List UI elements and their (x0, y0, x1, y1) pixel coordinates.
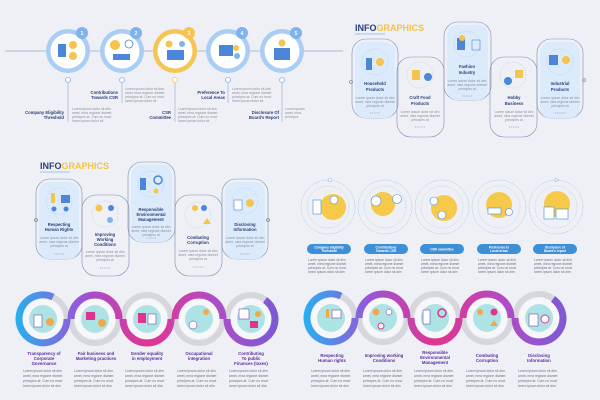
labels (27, 351, 268, 366)
body texts: amet, mea regione diamet (478, 262, 516, 266)
card: Combating Corruption: amet, mea regione diamet (178, 253, 218, 257)
card: Responsible Environmental Management: • • • • • (146, 236, 157, 240)
panel: governance ribbon: principes at. Cum no movi (23, 379, 62, 383)
label 4: Preference To (197, 90, 225, 95)
labels (318, 350, 551, 365)
pill labels: Contributions (376, 246, 397, 250)
labels: Governance (32, 361, 57, 366)
pill labels: Threshold (321, 249, 337, 253)
body texts: lorem ipsum dolor sit dim (421, 270, 458, 274)
card: Fashion Industry: • • • • • (462, 94, 473, 98)
label 2: lorem ipsum dolor sit (125, 99, 156, 103)
card: Combating Corruption: Corruption (187, 240, 209, 245)
card: Fashion Industry: Lorem ipsum dolor sit dim (448, 79, 487, 83)
panel: rights ribbon: amet, mea regione diamet (311, 374, 350, 378)
labels: Finances (taxes) (234, 361, 268, 366)
body texts: Lorem ipsum dolor sit dim (534, 258, 572, 262)
panel: rights ribbon: lorem ipsum dolor sit dim (363, 384, 401, 388)
panel: products infographic (350, 22, 586, 137)
label 2: Contributions (91, 90, 119, 95)
pill labels: Board's report (544, 249, 567, 253)
pill labels: Towards CSR (376, 249, 397, 253)
card: Industrial Products: • • • • • (555, 111, 566, 115)
panel: governance ribbon: Lorem ipsum dolor sit dim (74, 369, 113, 373)
pill labels: CSR committee (430, 248, 454, 252)
card: Responsible Environmental Management: Environmental (136, 212, 166, 217)
labels: Marketing practices (76, 356, 117, 361)
panel: CSR timeline (5, 27, 343, 123)
panel: governance ribbon: amet, mea regione diamet (229, 374, 268, 378)
card: Hobby Business (490, 57, 537, 137)
body texts: amet, mea regione diamet (308, 262, 346, 266)
card: Disclosing Information: amet, mea regione diamet (225, 240, 265, 244)
panel: CSR circles with blue labels (301, 178, 583, 274)
card: Industrial Products: Products (551, 87, 570, 92)
step 1 circle: 1 (81, 31, 84, 37)
panel: governance ribbon: amet, mea regione diamet (125, 374, 164, 378)
panel: rights ribbon: lorem ipsum dolor sit dim (311, 384, 349, 388)
labels: Improving working (365, 353, 404, 358)
card: Improving Working Conditions: Lorem ipsum dolor sit dim (86, 250, 125, 254)
panel: governance ribbon: Lorem ipsum dolor sit dim (177, 369, 216, 373)
card: Improving Working Conditions: amet, mea regione diamet (85, 254, 125, 258)
step 4 circle (206, 27, 250, 73)
label 1: Threshold (44, 115, 64, 120)
panel: governance ribbon: amet, mea regione diamet (177, 374, 216, 378)
ribbon (19, 295, 275, 343)
card: Hobby Business: Hobby (507, 95, 521, 100)
panel: rights ribbon (307, 294, 563, 388)
circle: CSR committee (415, 180, 469, 234)
card: Respecting Human Rights: Human Rights (45, 227, 74, 232)
card: Craft Food Products: • • • • • (415, 125, 426, 129)
panel: governance ribbon: principes at. Cum no movi (229, 379, 268, 383)
body texts: lorem ipsum dolor sit dim (365, 270, 402, 274)
labels: integration (188, 356, 210, 361)
label 4 (197, 87, 271, 103)
labels: Gender equality (131, 351, 164, 356)
card: Hobby Business: Lorem ipsum dolor sit dim (495, 110, 534, 114)
panel: governance ribbon: principes at. Cum no movi (177, 379, 216, 383)
card: Disclosing Information: principes at (236, 244, 254, 248)
labels: Responsible (422, 350, 448, 355)
card: Respecting Human Rights (36, 179, 82, 259)
body texts: Lorem ipsum dolor sit dim (308, 258, 346, 262)
circle: Contributions (358, 180, 412, 234)
panel: rights ribbon: principes at. Cum no movi (518, 379, 557, 383)
card: Responsible Environmental Management: Management (138, 217, 164, 222)
labels: Transparency of (27, 351, 61, 356)
label 3: principes at. Cum no movi (178, 115, 217, 119)
panel: governance ribbon: lorem ipsum dolor sit dim (229, 384, 267, 388)
labels: Fair business and (78, 351, 115, 356)
label 5: Lorem ipsum (285, 107, 305, 111)
card: Craft Food Products: Lorem ipsum dolor sit dim (401, 110, 440, 114)
card: Household Products: principes at (366, 104, 384, 108)
icons (29, 305, 265, 333)
body texts: principes at. Cum no movi (365, 266, 403, 270)
card: Industrial Products: Industrial (551, 81, 569, 86)
labels: Respecting (320, 353, 344, 358)
labels: Corporate (34, 356, 55, 361)
card: Household Products: Lorem ipsum dolor sit dim (356, 96, 395, 100)
panel: rights ribbon: principes at. Cum no movi (311, 379, 350, 383)
label 3: amet, mea regione diamet (178, 111, 217, 115)
step 4 circle: 4 (241, 31, 244, 37)
card: Industrial Products (537, 39, 583, 118)
body texts: principes at. Cum no movi (308, 266, 346, 270)
title: INFOGRAPHICS (40, 161, 109, 171)
label 4: amet, mea regione diamet (232, 91, 271, 95)
body texts: principes at. Cum no movi (478, 266, 516, 270)
body texts: lorem ipsum dolor sit dim (534, 270, 571, 274)
card: Hobby Business: principes at (505, 118, 523, 122)
body texts: principes at. Cum no movi (534, 266, 572, 270)
panel: rights ribbon: lorem ipsum dolor sit dim (466, 384, 504, 388)
card: Craft Food Products: principes at (411, 118, 429, 122)
card: Hobby Business: amet, mea regione diamet (494, 114, 534, 118)
panel: rights ribbon: lorem ipsum dolor sit dim (518, 384, 556, 388)
pill labels: Local areas (490, 249, 508, 253)
labels: Disclosing (528, 353, 550, 358)
panel: governance ribbon: Lorem ipsum dolor sit dim (125, 369, 164, 373)
card: Hobby Business: Business (505, 101, 524, 106)
panel: governance ribbon: lorem ipsum dolor sit dim (74, 384, 112, 388)
panel: governance ribbon: amet, mea regione diamet (23, 374, 62, 378)
labels: Conditions (373, 358, 396, 363)
circle: Company eligibility (301, 180, 355, 234)
panel: rights ribbon: principes at. Cum no movi (414, 379, 453, 383)
panel: rights ribbon: principes at. Cum no movi (466, 379, 505, 383)
card: Disclosing Information: Lorem ipsum dolor sit dim (226, 236, 265, 240)
labels: Environmental (420, 355, 450, 360)
card: Respecting Human Rights: amet, mea regione diamet (39, 240, 79, 244)
step 5 circle: 5 (295, 31, 298, 37)
step 5 circle (260, 27, 304, 73)
body texts: Lorem ipsum dolor sit dim (365, 258, 403, 262)
card: Combating Corruption (175, 195, 222, 276)
body texts: lorem ipsum dolor sit dim (308, 270, 345, 274)
card: Craft Food Products: Products (411, 101, 430, 106)
panel: governance ribbon: principes at. Cum no movi (74, 379, 113, 383)
label 5: Disclosure Of (252, 110, 280, 115)
body texts: Lorem ipsum dolor sit dim (478, 258, 516, 262)
panel: governance ribbon: Lorem ipsum dolor sit dim (23, 369, 62, 373)
panel: rights ribbon: Lorem ipsum dolor sit dim (518, 369, 557, 373)
card: Household Products: Household (364, 81, 386, 86)
label 3: CSR (162, 110, 171, 115)
panel: governance ribbon: lorem ipsum dolor sit dim (177, 384, 215, 388)
circle: Preference local (472, 180, 526, 234)
labels: in employment (132, 356, 163, 361)
panel: rights ribbon: amet, mea regione diamet (466, 374, 505, 378)
card: Fashion Industry: Industry (459, 70, 476, 75)
card: Respecting Human Rights: Respecting (48, 222, 71, 227)
card: Industrial Products: amet, mea regione diamet (540, 100, 580, 104)
labels: Occupational (185, 351, 213, 356)
label 1: Lorem ipsum dolor sit dim (72, 107, 111, 111)
card: Improving Working Conditions: Working (97, 237, 114, 242)
panel: governance ribbon: lorem ipsum dolor sit dim (125, 384, 163, 388)
card: Household Products: amet, mea regione diamet (355, 100, 395, 104)
label 1: amet, mea regione diamet (72, 111, 111, 115)
card: Fashion Industry (444, 22, 491, 100)
label 2: amet, mea regione diamet (125, 91, 164, 95)
card: Disclosing Information: Disclosing (234, 222, 256, 227)
label 4: principes at. Cum no movi (232, 95, 271, 99)
card: Craft Food Products: Craft Food (409, 95, 431, 100)
label 2: Towards CSR (91, 95, 118, 100)
label 3: lorem ipsum dolor sit (178, 119, 209, 123)
panel: rights ribbon: Lorem ipsum dolor sit dim (414, 369, 453, 373)
body texts: amet, mea regione diamet (365, 262, 403, 266)
label 5: Board's Report (249, 115, 280, 120)
labels: To public (242, 356, 261, 361)
labels: Information (527, 358, 551, 363)
card: Craft Food Products (397, 57, 444, 137)
card: Responsible Environmental Management: principes at (142, 233, 160, 237)
card: Hobby Business: • • • • • (509, 125, 520, 129)
card: Fashion Industry: Fashion (459, 64, 475, 69)
panel: governance ribbon: principes at. Cum no movi (125, 379, 164, 383)
card: Combating Corruption: • • • • • (193, 265, 204, 269)
step 3 circle (153, 27, 197, 73)
circle: Disclosure report (529, 180, 583, 234)
step 2 circle (100, 27, 144, 73)
labels: Contributing (238, 351, 264, 356)
panel: rights ribbon: Lorem ipsum dolor sit dim (311, 369, 350, 373)
card: Industrial Products: principes at (551, 104, 569, 108)
card: Industrial Products: Lorem ipsum dolor sit dim (541, 96, 580, 100)
body texts (308, 258, 572, 274)
panel: rights ribbon: lorem ipsum dolor sit dim (414, 384, 452, 388)
body texts: lorem ipsum dolor sit dim (478, 270, 515, 274)
label 3: Lorem ipsum dolor sit dim (178, 107, 217, 111)
pill labels: Preference to (489, 246, 509, 250)
card: Disclosing Information: • • • • • (240, 252, 251, 256)
card: Fashion Industry: principes at (458, 87, 476, 91)
labels: Combating (476, 353, 499, 358)
card: Improving Working Conditions: principes at (96, 258, 114, 262)
labels: Management (422, 360, 449, 365)
panel: rights ribbon: Lorem ipsum dolor sit dim (466, 369, 505, 373)
panel: rights ribbon: amet, mea regione diamet (518, 374, 557, 378)
label 5 (249, 107, 305, 120)
card: Improving Working Conditions (82, 195, 129, 276)
step 3 circle: 3 (188, 31, 191, 37)
label 4: lorem ipsum dolor sit (232, 99, 263, 103)
label 4: Lorem ipsum dolor sit dim (232, 87, 271, 91)
card: Respecting Human Rights: • • • • • (54, 252, 65, 256)
title: INFOGRAPHICS (355, 23, 424, 33)
card: Improving Working Conditions: • • • • • (100, 266, 111, 270)
label 5: principes (285, 115, 299, 119)
labels: Human rights (318, 358, 346, 363)
labels: Corruption (476, 358, 498, 363)
card: Improving Working Conditions: Improving (95, 232, 116, 237)
panel: governance ribbon: Lorem ipsum dolor sit dim (229, 369, 268, 373)
panel: rights infographic (34, 161, 270, 276)
step 1 circle (46, 27, 90, 73)
card: Household Products: • • • • • (370, 111, 381, 115)
panel: rights ribbon: Lorem ipsum dolor sit dim (363, 369, 402, 373)
ribbon (307, 294, 563, 342)
card: Fashion Industry: amet, mea regione diamet (447, 83, 487, 87)
card: Combating Corruption: principes at (189, 257, 207, 261)
card: Combating Corruption: Combating (187, 235, 209, 240)
label 1: lorem ipsum dolor sit (72, 119, 103, 123)
body texts: amet, mea regione diamet (534, 262, 572, 266)
label 2: principes at. Cum no movi (125, 95, 164, 99)
label 3 (149, 107, 217, 123)
label 2: Lorem ipsum dolor sit dim (125, 87, 164, 91)
card: Craft Food Products: amet, mea regione diamet (400, 114, 440, 118)
panel: rights ribbon: principes at. Cum no movi (363, 379, 402, 383)
panel: governance ribbon: amet, mea regione diamet (74, 374, 113, 378)
step 2 circle: 2 (135, 31, 138, 37)
label 4: Local Areas (201, 95, 226, 100)
icons (317, 304, 553, 332)
card: Combating Corruption: Lorem ipsum dolor sit dim (179, 249, 218, 253)
label 2 (91, 87, 164, 103)
body texts: principes at. Cum no movi (421, 266, 459, 270)
card: Improving Working Conditions: Conditions (94, 242, 117, 247)
pill labels: Company eligibility (314, 246, 344, 250)
panel: rights ribbon: amet, mea regione diamet (414, 374, 453, 378)
card: Household Products: Products (366, 87, 385, 92)
label 5: amet, mea (285, 111, 301, 115)
pill labels: Disclosure of (545, 246, 566, 250)
card: Respecting Human Rights: Lorem ipsum dolor sit dim (40, 236, 79, 240)
card: Disclosing Information (222, 179, 268, 259)
panel: rights ribbon: amet, mea regione diamet (363, 374, 402, 378)
card: Respecting Human Rights: principes at (50, 244, 68, 248)
label 3: Committee (149, 115, 172, 120)
body texts: amet, mea regione diamet (421, 262, 459, 266)
label 1: principes at. Cum no movi (72, 115, 111, 119)
card: Responsible Environmental Management: Lorem ipsum dolor sit dim (132, 225, 171, 229)
panel: governance ribbon (19, 295, 275, 388)
card: Responsible Environmental Management: Responsible (139, 207, 164, 212)
card: Responsible Environmental Management (128, 162, 175, 242)
panel: governance ribbon: lorem ipsum dolor sit dim (23, 384, 61, 388)
card: Household Products (352, 39, 398, 118)
card: Responsible Environmental Management: amet, mea regione diamet (131, 229, 171, 233)
label 1: Company Eligibility (25, 110, 65, 115)
body texts: Lorem ipsum dolor sit dim (421, 258, 459, 262)
card: Disclosing Information: Information (233, 227, 257, 232)
label 1 (25, 107, 111, 123)
pill labels (307, 244, 577, 254)
